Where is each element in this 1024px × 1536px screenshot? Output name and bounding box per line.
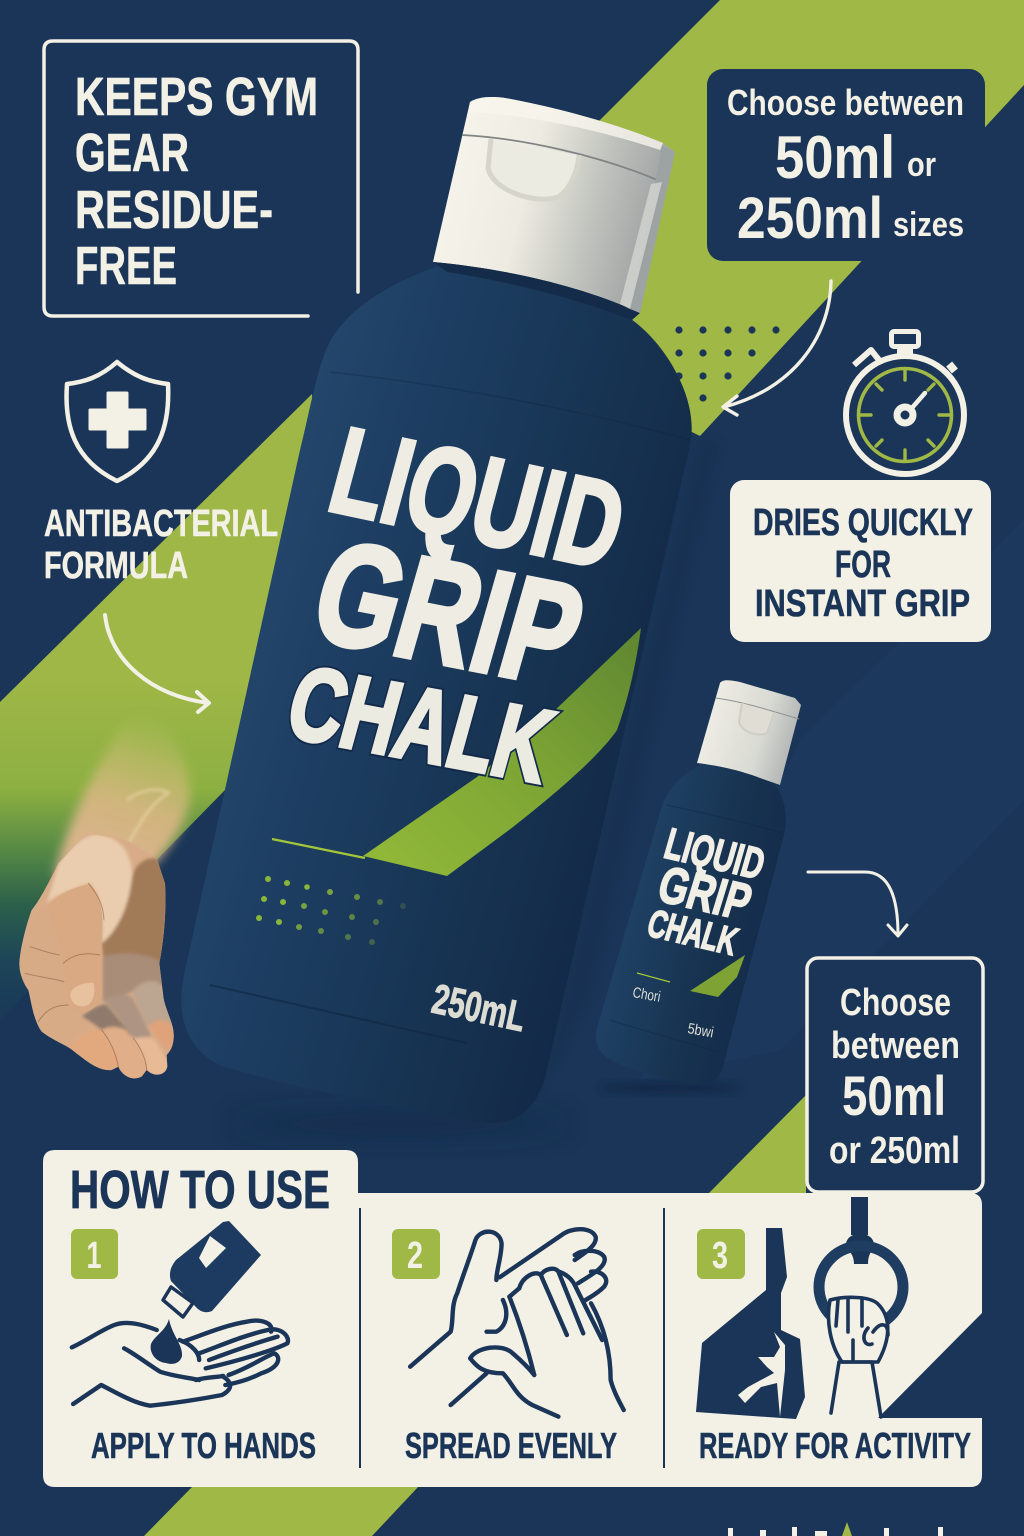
dot grid on green band	[675, 326, 780, 402]
bottle pouring	[170, 1221, 261, 1312]
icon: antibacterial shield	[67, 362, 168, 481]
step 2	[392, 1229, 624, 1466]
hand silhouette	[19, 833, 174, 1078]
step 2: SPREAD EVENLY	[405, 1425, 617, 1466]
arrow: sizes to bottle	[723, 281, 831, 415]
green band: lower right	[708, 1095, 806, 1194]
small bottle product name: GRIP	[651, 856, 758, 932]
callout: keeps gym gear residue-free: RESIDUE-	[75, 180, 273, 240]
callout: dries quickly: FOR	[835, 544, 891, 586]
bottle body	[181, 230, 692, 1123]
skin creases	[25, 883, 147, 1070]
thumb	[52, 884, 102, 1012]
heading: HOW TO USE	[70, 1160, 330, 1220]
body highlights	[330, 372, 690, 440]
step 3: 3	[712, 1235, 728, 1277]
drop	[151, 1319, 182, 1364]
dividers	[360, 1208, 664, 1468]
arrow: small bottle to sizes	[808, 872, 907, 936]
callout: size choice, top right: 50ml	[775, 124, 895, 191]
arrow: formula to hand	[105, 615, 209, 712]
left fingers	[19, 934, 70, 1048]
small bottle body	[596, 750, 786, 1084]
product name: LIQUID	[317, 403, 638, 596]
bottle shadow	[230, 1112, 570, 1136]
finger tips	[70, 1030, 120, 1072]
green band: top right	[420, 0, 1024, 436]
hands outline, traced	[72, 1321, 288, 1406]
palm lower	[103, 953, 165, 1002]
cap lip line	[462, 135, 662, 182]
step 2: 2	[407, 1235, 423, 1277]
callout: size choice, top right: 250ml	[737, 186, 883, 251]
back of hand	[47, 834, 133, 943]
callout: size choice, lower right: between	[831, 1025, 960, 1067]
image: hand with arm fading into green	[18, 715, 190, 1080]
step 1: APPLY TO HANDS	[91, 1425, 316, 1466]
small bottle cap	[697, 680, 801, 785]
arm	[55, 715, 190, 890]
big bottle	[181, 97, 720, 1136]
gym ring strap	[851, 1197, 868, 1235]
cap	[433, 97, 675, 320]
callout: size choice, top right	[707, 69, 985, 261]
small bottle product name: CHALK	[642, 902, 743, 964]
small bottle fine print: 5bwi	[686, 1020, 715, 1041]
small bottle product name	[642, 819, 770, 964]
hand shading, clipped to silhouette	[18, 834, 174, 1080]
step 1	[71, 1221, 316, 1466]
callout: dries quickly	[730, 480, 991, 642]
callout: keeps gym gear residue-free: FREE	[75, 236, 177, 296]
callout: size choice, lower right	[807, 958, 983, 1192]
step 1: 1	[86, 1233, 102, 1276]
panel: how to use	[43, 1150, 982, 1487]
text: antibacterial formula: ANTIBACTERIAL	[44, 503, 278, 545]
text: antibacterial formula	[44, 503, 278, 587]
palm shadow	[102, 858, 167, 963]
background lighter diagonal stripe	[640, 520, 1024, 1080]
product name: GRIP	[297, 510, 600, 717]
cap side facet	[630, 146, 675, 313]
cap thumb tab	[488, 139, 579, 199]
small green chevron	[690, 955, 745, 997]
small bottle fine print	[631, 984, 715, 1041]
size label: 250mL	[428, 975, 530, 1040]
callout: size choice, lower right: 50ml	[842, 1064, 946, 1127]
callout: size choice, top right: or	[907, 146, 936, 184]
arm tendons	[127, 790, 170, 843]
green band: bottom	[144, 1486, 419, 1536]
cap rim shadow	[433, 262, 640, 320]
shadow on background to the right	[540, 440, 720, 1090]
curled fingers	[82, 1005, 132, 1035]
product name: CHALK	[276, 645, 565, 805]
text: antibacterial formula: FORMULA	[44, 545, 188, 587]
product name	[276, 403, 638, 805]
green band: left	[0, 394, 330, 1020]
small accent line	[637, 973, 670, 982]
step 3	[696, 1197, 971, 1466]
small bottle	[596, 680, 801, 1094]
callout: size choice, lower right: Choose	[840, 982, 951, 1024]
callout: size choice, top right: sizes	[893, 206, 964, 244]
label accent line	[272, 839, 365, 858]
gym ring	[819, 1246, 903, 1328]
callout: size choice, top right: Choose between	[727, 82, 964, 123]
callout: dries quickly: INSTANT GRIP	[755, 583, 970, 625]
small bottle fine print: Chori	[631, 984, 662, 1006]
callout: keeps gym gear residue-free: KEEPS GYM	[75, 67, 318, 127]
rubbing hands, traced	[410, 1229, 624, 1417]
callout: keeps gym gear residue-free	[44, 41, 358, 316]
callout: keeps gym gear residue-free: GEAR	[75, 123, 189, 183]
cap lid highlight	[468, 97, 663, 150]
climbing cliff	[696, 1228, 805, 1419]
cropped marks at bottom edge	[728, 1522, 943, 1536]
product name: CHALK	[276, 645, 565, 805]
label dot pattern	[256, 876, 406, 945]
small bottle product name: LIQUID	[659, 819, 770, 889]
thumb nail	[70, 983, 94, 1006]
icon: stopwatch	[846, 332, 964, 474]
fist and arm	[828, 1297, 888, 1417]
callout: size choice, lower right: or 250ml	[829, 1130, 960, 1172]
label green chevron	[363, 628, 641, 876]
small bottle shadow	[600, 1082, 740, 1094]
climber	[738, 1332, 785, 1417]
